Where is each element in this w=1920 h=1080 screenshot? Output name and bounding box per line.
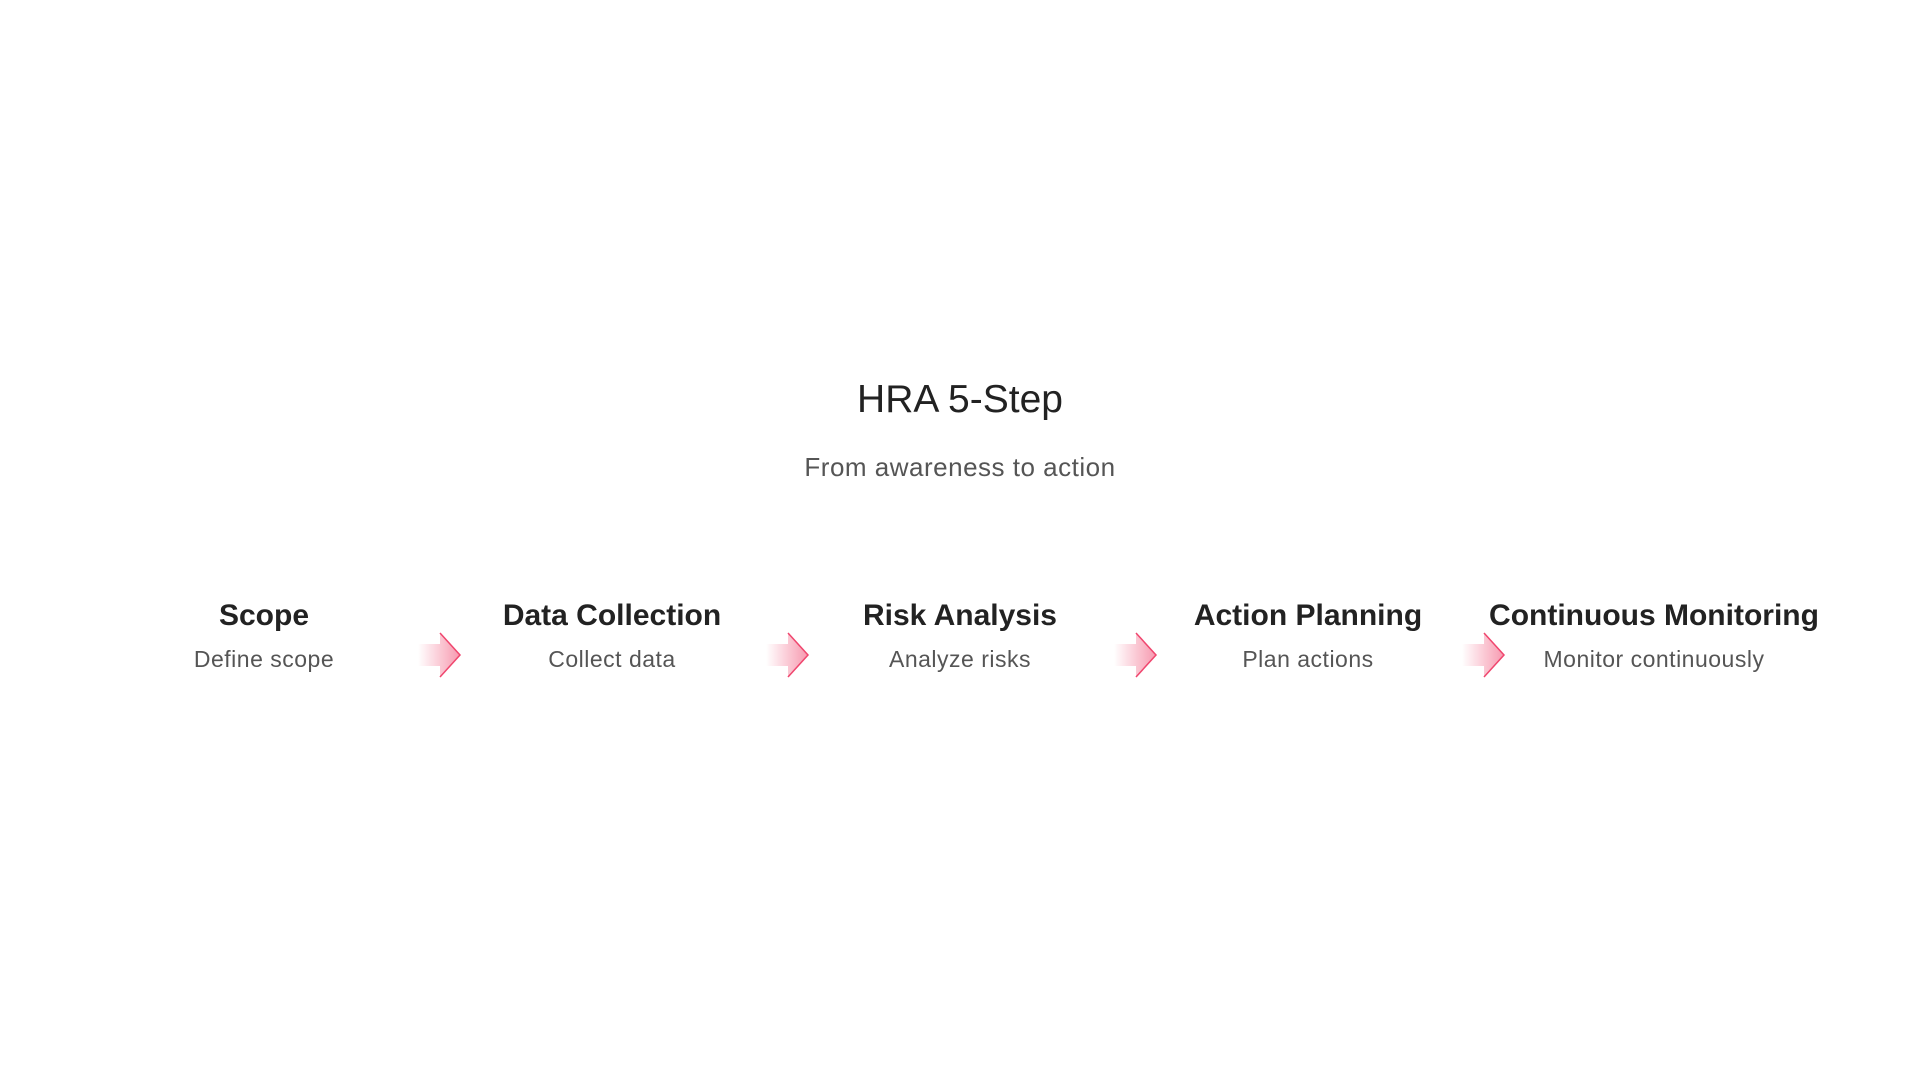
step: Continuous Monitoring	[1489, 599, 1819, 672]
step: Scope: Define scope	[194, 646, 334, 672]
step: Data Collection: Data Collection	[503, 599, 721, 632]
arrow 4	[1466, 632, 1505, 678]
step: Continuous Monitoring: Monitor continuously	[1544, 646, 1764, 672]
title: HRA 5-Step	[857, 378, 1063, 421]
step: Continuous Monitoring: Continuous Monitoring	[1489, 599, 1819, 632]
step: Scope	[194, 599, 334, 672]
step: Action Planning: Plan actions	[1242, 646, 1374, 672]
step: Action Planning	[1194, 599, 1422, 672]
subtitle: From awareness to action	[804, 452, 1116, 482]
step: Risk Analysis	[863, 599, 1057, 672]
arrow 3	[1118, 632, 1157, 678]
step: Risk Analysis: Risk Analysis	[863, 599, 1057, 632]
arrow 2	[770, 632, 809, 678]
step: Action Planning: Action Planning	[1194, 599, 1422, 632]
step: Scope: Scope	[219, 599, 309, 632]
step: Data Collection	[503, 599, 721, 672]
step: Data Collection: Collect data	[548, 646, 676, 672]
step: Risk Analysis: Analyze risks	[889, 646, 1031, 672]
arrow 1	[422, 632, 461, 678]
